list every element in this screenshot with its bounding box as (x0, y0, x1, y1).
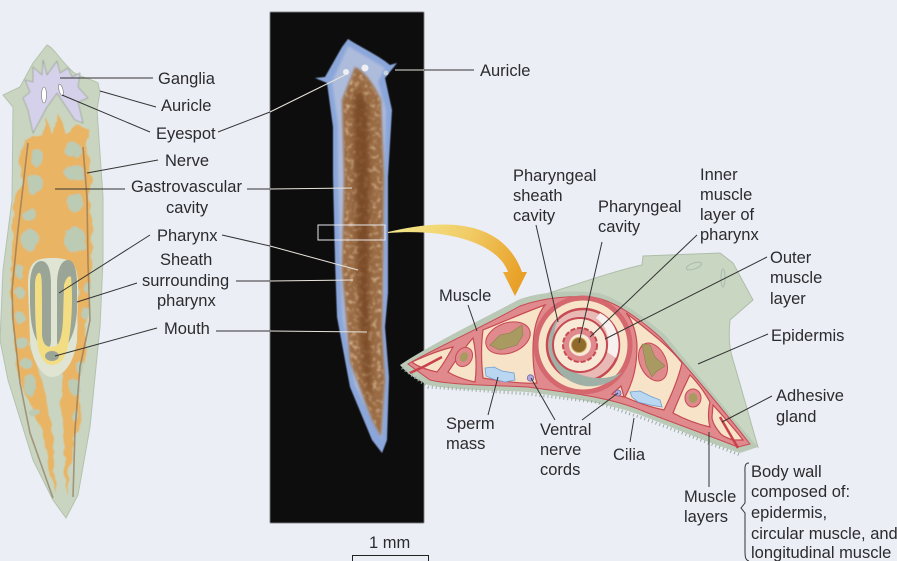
labels: cross-section: Muscle (439, 287, 491, 305)
labels: cross-section (439, 166, 844, 526)
labels: cross-section: muscle (770, 269, 822, 287)
labels: cross-section: nerve (540, 441, 581, 459)
labels: flatworm left: Mouth (164, 320, 210, 338)
gut mottling (343, 70, 384, 434)
arrow: magnification (388, 224, 527, 296)
brace and body wall note: epidermis, (751, 504, 827, 522)
labels: cross-section: layer of (700, 206, 755, 224)
brace and body wall note: circular muscle, and (751, 525, 897, 543)
labels: flatworm left: cavity (166, 199, 209, 217)
labels: cross-section: Pharyngeal (513, 167, 596, 185)
labels: flatworm left (55, 70, 242, 356)
photo eyespots (343, 64, 388, 76)
labels: cross-section: layers (684, 508, 728, 526)
labels: cross-section: gland (776, 408, 816, 426)
labels: cross-section: Muscle (684, 488, 736, 506)
surface folds (685, 260, 725, 287)
labels: flatworm left: pharynx (157, 292, 216, 310)
labels: cross-section: sheath (513, 187, 563, 205)
labels: flatworm left: Auricle (161, 97, 211, 115)
cilia (402, 368, 740, 455)
labels: cross-section: mass (446, 435, 485, 453)
black background (270, 12, 424, 523)
adhesive glands (410, 357, 738, 448)
small pocket beside ring (612, 386, 624, 397)
gut lobes (452, 316, 701, 407)
brace and body wall note: composed of: (751, 483, 850, 501)
section box (318, 225, 385, 240)
body outline (0, 45, 103, 518)
worm body (315, 39, 397, 453)
cross-section diagram (400, 166, 897, 561)
labels: flatworm left: Ganglia (158, 70, 216, 88)
labels: cross-section: cavity (513, 207, 556, 225)
gut centre streak (353, 85, 371, 410)
labels: cross-section: layer (770, 290, 806, 308)
labels: cross-section: cavity (598, 218, 641, 236)
labels: cross-section: Adhesive (776, 387, 844, 405)
labels: flatworm left: Nerve (165, 152, 209, 170)
ventral nerve cords (527, 375, 621, 396)
labels: cross-section: Epidermis (771, 327, 844, 345)
labels: cross-section: muscle (700, 186, 752, 204)
ganglia (23, 60, 88, 133)
brace and body wall note (741, 463, 897, 561)
gut (342, 67, 385, 437)
nerve cords (12, 143, 90, 498)
labels: cross-section: Pharyngeal (598, 198, 681, 216)
scale bar: 1 mm (369, 534, 410, 552)
labels: cross-section: Inner (700, 166, 738, 184)
epidermis (400, 291, 758, 453)
compartments (412, 305, 743, 440)
labels: flatworm left: Pharynx (157, 227, 218, 245)
sheath surrounding pharynx (28, 258, 78, 377)
labels: cross-section: pharynx (700, 226, 759, 244)
labels: flatworm left: Gastrovascular (131, 178, 242, 196)
pharynx rings (536, 298, 630, 392)
label: auricle: Auricle (480, 62, 530, 80)
labels: cross-section: Sperm (446, 415, 495, 433)
labels: flatworm left: surrounding (142, 272, 229, 290)
labels: cross-section: Ventral (540, 421, 591, 439)
labels: cross-section: Outer (770, 249, 812, 267)
eyespots (42, 84, 64, 103)
pharynx (30, 260, 77, 365)
illustration: flatworm anatomy (0, 45, 242, 518)
sheath cavity crescent (549, 317, 622, 386)
gastrovascular cavity (11, 113, 93, 495)
photo panel: live planarian (216, 12, 530, 561)
muscle wall (408, 297, 750, 447)
brace and body wall note: Body wall (751, 463, 822, 481)
posterior body green (540, 253, 758, 447)
pale centre band (332, 46, 386, 440)
labels: cross-section: cords (540, 461, 580, 479)
sperm masses (485, 367, 662, 407)
labels: flatworm left: Sheath (160, 251, 212, 269)
labels: flatworm left: Eyespot (156, 125, 216, 143)
scale bar (352, 534, 428, 561)
labels: cross-section: Cilia (613, 446, 646, 464)
photo pointer lines (216, 70, 474, 332)
